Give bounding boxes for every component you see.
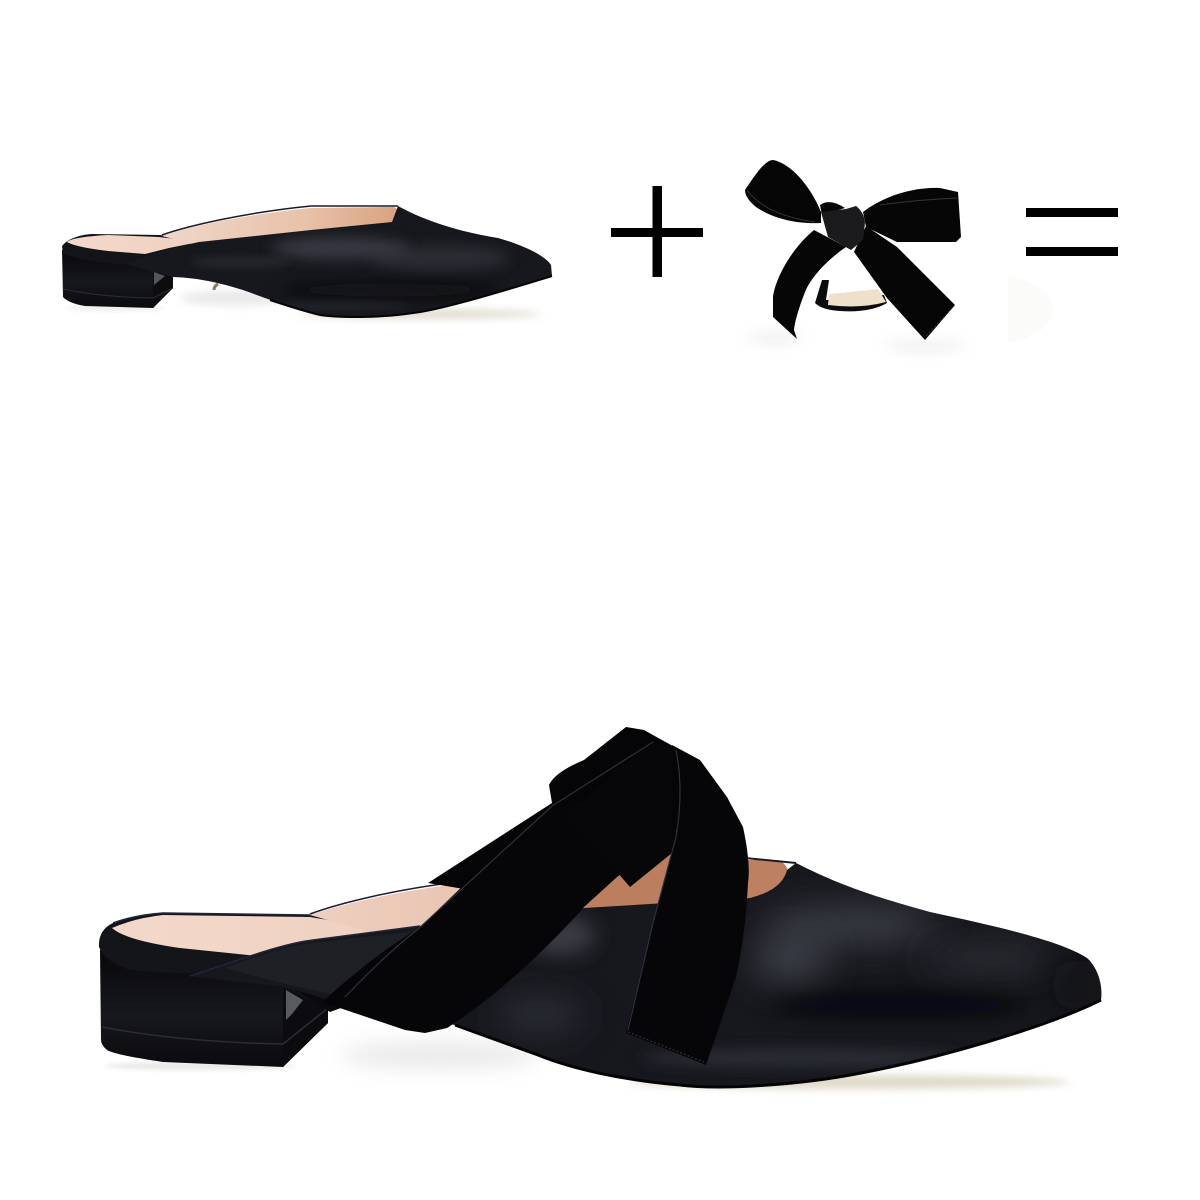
bow right loop [863,188,961,242]
sole edge large [455,1000,1101,1087]
velvet bow [745,160,967,352]
interior lining under bow [580,850,788,912]
upper small [125,206,552,317]
insole small [67,235,199,254]
large mule with bow [99,727,1110,1089]
equals sign [1026,208,1118,256]
sole edge small [270,276,552,317]
bow right tail [854,226,955,340]
plus sign [611,186,703,277]
heel cup large [99,913,370,973]
bow left tail [773,230,846,339]
heel block small [62,250,173,308]
bow left loop [745,160,821,223]
vamp rim large [745,858,796,863]
infographic: shoe plus bow equals finished shoe [62,160,1118,1093]
side strap sheen [225,932,410,996]
bow shadow [747,332,967,352]
heel block large [100,950,328,1067]
ribbon seams [345,742,704,1062]
shadow under small shoe [65,290,540,319]
bow seams [747,190,957,337]
pin small [214,284,218,290]
heel-to-arch join [285,983,352,1012]
lining rim large [310,881,467,914]
bow knot [821,206,865,250]
leather highlights small [190,238,510,310]
shadow under large shoe [105,1041,1070,1089]
faint shadow patch [1008,275,1053,343]
bow rear fold [820,202,845,215]
lining small [162,207,398,246]
ribbon flap [566,742,680,887]
right hanging ribbon [626,745,749,1065]
lining large [310,883,467,934]
lining rim small [162,206,398,235]
small mule shoe [62,206,552,319]
upper edge piping [113,913,420,976]
main diagonal ribbon [322,806,640,1033]
heel cup small [62,234,205,264]
leather highlights large [495,907,1110,1067]
upper large [190,863,1101,1087]
insole large [112,915,385,957]
bow ring [815,280,887,311]
back ribbon [428,727,680,890]
